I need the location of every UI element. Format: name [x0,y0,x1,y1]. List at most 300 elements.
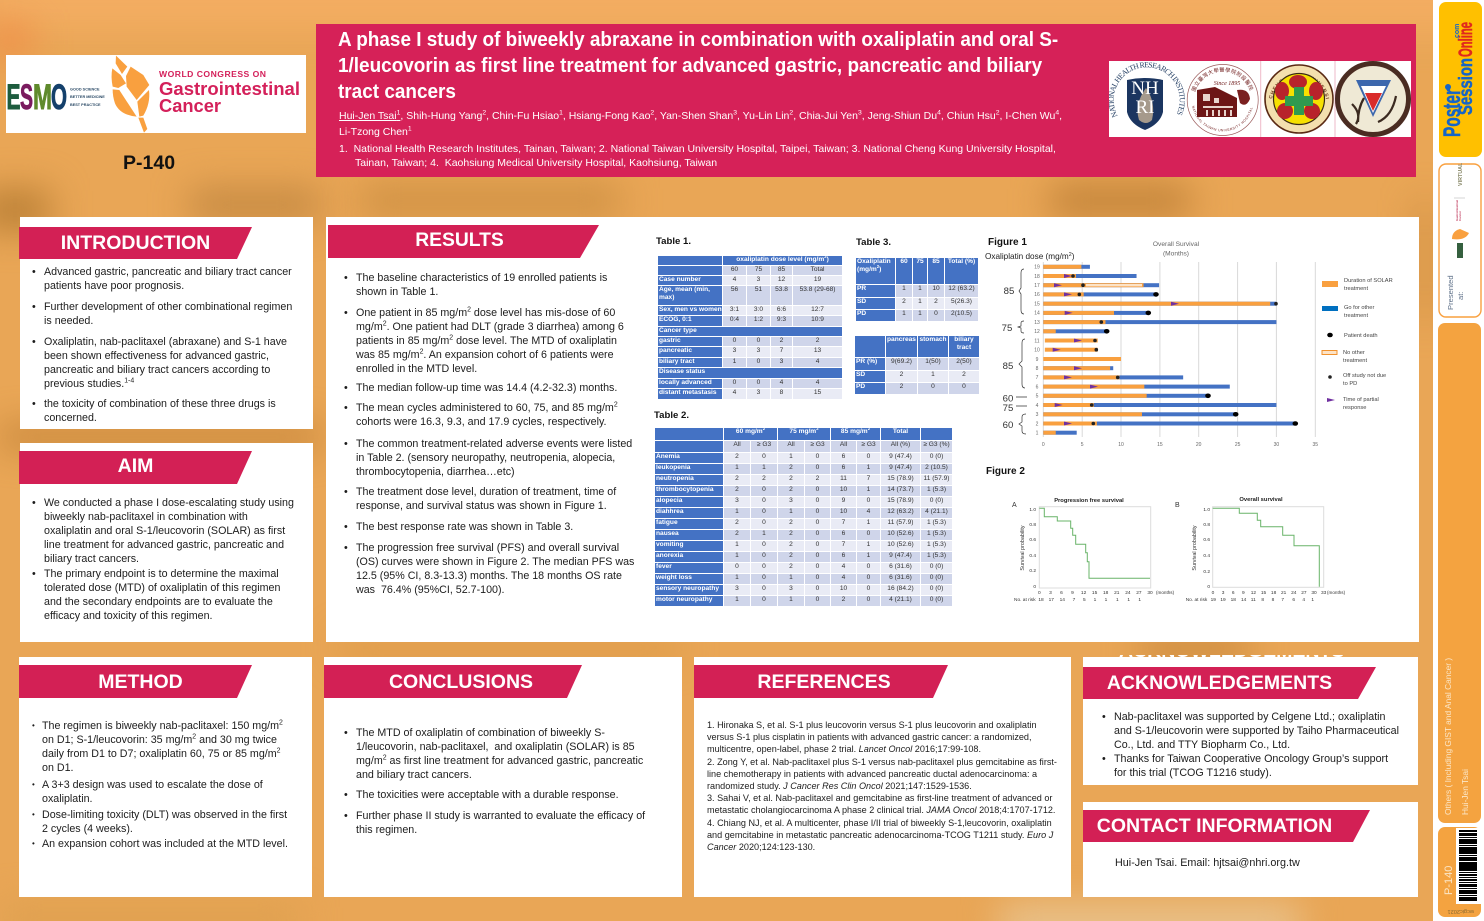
table 3: response by dose: PR [857,285,866,292]
table 3: response by dose: 75 [916,258,924,265]
table 2: adverse events: 0 [762,574,766,580]
panel A: progression free survival: 18 [1103,590,1109,596]
table 2: adverse events: 0 [816,584,819,592]
figure 1: swimmer plot: 6 [1036,384,1039,390]
panel B: overall survival: 21 [1281,590,1287,596]
bullet: mg/m2. One patient had DLT (grade 3 diarrhea) among 6 [356,321,624,333]
panel: method: • [32,810,35,819]
bullet [32,497,294,565]
panel A: progression free survival: 0.2 [1029,568,1036,574]
poster id tab with barcode: P-140 [1443,866,1455,895]
table 2: adverse events: 2 [842,596,845,602]
off study markers [1071,274,1278,425]
bullet: 1/leucovorin, nab-paclitaxel, and oxaliplatin (SOLAR) is 85 [356,741,635,753]
panel B: overall survival: 1 [1311,597,1314,603]
bullet [344,306,624,375]
panel: results: • [344,521,348,533]
table 3: response by dose: 2 [902,298,906,305]
table 1: 0 [733,337,736,344]
table 2: adverse events: 0 [867,584,870,592]
figure 1: swimmer plot: 15 [1034,302,1040,308]
table 1: 4 [780,379,783,386]
figure 1: swimmer plot: 30 [1274,442,1279,448]
table 2: adverse events: 11 [840,474,847,482]
table 2: adverse events: 10 (52.6) [887,540,914,548]
table 1: 10:9 [811,316,824,323]
figure 2: survival curves: Figure 2 [986,466,1025,477]
bullet: and biliary tract cancers. [356,769,472,781]
table 2: adverse events: sensory neuropathy [656,584,719,592]
bullet: in Table 2. (sensory neuropathy, neutropenia, alopecia, [356,452,615,464]
reference list: randomized study. J Cancer Res Clin Oncol 2021;147:1529-1536. [707,781,972,791]
panel A: progression free survival: 3 [1049,590,1052,596]
table 3: response by dose: 5(26.3) [951,298,972,305]
table 2: adverse events: ≥ G3 (%) [923,441,950,448]
table 2: adverse events: 1 [789,452,793,460]
table 2: adverse events: 3 [735,584,739,592]
panel A: progression free survival: 1 [1116,597,1119,603]
legend: treatment [1343,358,1367,364]
panel A: progression free survival: 6 [1060,590,1063,596]
panel: contact information [1083,802,1418,897]
table 2: adverse events: 1 [867,540,870,548]
table 2: adverse events: weight loss [656,574,692,580]
ESMO tagline: BEST PRACTICE [70,103,101,107]
table 1: 4 [816,358,819,365]
table 2 title: Table 2. [654,410,689,421]
table 2: adverse events: 0 [816,596,819,602]
table 1: Cancer type [659,327,697,334]
table 2: adverse events: 1 (5.3) [927,552,946,558]
bullet [32,779,263,805]
table 3: response by tumour type [855,336,979,394]
poster number: P-140 [123,152,175,174]
panel A: progression free survival: 1.0 [1029,507,1036,513]
partial response markers [1053,274,1179,426]
table 2: adverse events: 6 [842,452,845,460]
bullet [32,568,280,622]
table 1: 4 [816,379,819,386]
panel B: overall survival: 0.4 [1203,553,1210,559]
author name: Hui-Jen Tsai [1460,769,1470,815]
panel A: progression free survival: 30 [1147,590,1153,596]
heading: aim [19,451,252,484]
panel: acknowledgements: • [1102,711,1106,723]
bullet: We conducted a phase I dose-escalating study using [44,497,294,509]
bullet: line treatment for advanced gastric, pancreatic and [44,539,284,551]
figure 1: swimmer plot: 10 [1034,348,1040,354]
table 2: adverse events: 10 [840,486,847,492]
figure 1: swimmer plot: 20 [1196,442,1202,448]
table 2: adverse events: 2 [789,464,793,470]
panel A: progression free survival: 0.6 [1029,537,1036,543]
table 2: adverse events: 0 [867,596,870,602]
ESMO wordmark [6,78,67,117]
table 3: response by tumour type: 2 [962,371,966,378]
table 2: adverse events: ≥ G3 [810,441,825,448]
panel B: overall survival: (months) [1327,590,1346,595]
panel: aim [20,443,313,642]
leaf icon [112,56,149,133]
poster title: 1/leucovorin as first line treatment for advanced gastric, pancreatic and biliary [338,55,1042,77]
table 3: response by tumour type: pancreas [887,336,916,343]
bullet: previous studies.1-4 [44,378,134,390]
bullet: Dose-limiting toxicity (DLT) was observed in the first [42,809,287,821]
table 2: adverse events: 0 [816,518,819,526]
table 1: 19 [814,276,821,283]
table 2: adverse events: 14 (73.7) [887,486,914,492]
figure 1: swimmer plot: 35 [1313,442,1318,448]
bullet [344,727,643,781]
figure 1: swimmer plot: 13 [1034,320,1040,326]
figure 2: survival curves [986,466,1346,603]
figure 1: swimmer plot: 12 [1034,329,1040,335]
panel A: progression free survival: 9 [1071,590,1074,596]
table 2: adverse events: 0 [867,562,870,570]
table 2: adverse events: 0 [816,496,819,504]
table 2: adverse events: 1 [867,464,870,470]
table 2: adverse events: 15 (78.9) [887,496,914,504]
table 3: response by tumour type: 2(50) [956,358,972,365]
table 2: adverse events: 0 [867,530,870,536]
seal: National Taiwan University Hospital [1186,64,1259,136]
bullet: Nab-paclitaxel was supported by Celgene Ltd.; oxaliplatin [1114,711,1386,723]
no other treatment segment [1086,284,1142,286]
panel B: overall survival: 8 [1261,597,1264,603]
table 3: response by dose [856,258,978,321]
bullet [32,809,287,835]
panel B: overall survival: Survival probability [1192,525,1198,571]
bullet: The progression free survival (PFS) and overall survival [356,542,619,554]
panel A: progression free survival: 1 [1105,597,1108,603]
bullet: oxaliplatin and oral S-1/leucovorin (SOLAR) as first [44,525,285,537]
legend: to PD [1343,381,1357,387]
table 3: response by dose: Oxaliplatin (mg/m2) [857,258,891,272]
panel B: overall survival: 14 [1241,597,1247,603]
table 2: adverse events: 0 [816,530,819,536]
panel: introduction [20,217,313,429]
panel A: progression free survival: 21 [1114,590,1120,596]
heading: acknowledgements: ACKNOWLEDGEMENTS [1107,672,1332,694]
congress name: Cancer [159,96,221,116]
panel B: overall survival: No. at risk [1186,597,1208,603]
table 1: 0 [733,379,736,386]
panel B: overall survival: 19 [1220,597,1226,603]
bullet [344,542,634,596]
table 3: response by dose: 2(10.5) [951,310,972,317]
table 2: adverse events: 2 [762,474,766,482]
bullet: on D1. [42,762,74,774]
table 2: adverse events: leukopenia [656,464,690,470]
table 3: response by dose: 0 [934,310,938,317]
heading: results: RESULTS [415,230,504,251]
bullet: thrombocytopenia, diarrhea…etc) [356,466,515,478]
table 2: adverse events: 0 (0) [930,496,943,504]
table 2: adverse events: 1 (5.3) [927,486,946,492]
panel A: progression free survival: 15 [1092,590,1098,596]
bullet [344,810,646,836]
table 1: Age, mean (min, max) [659,286,710,300]
table 2: adverse events: 0 (0) [930,584,943,592]
table 2: adverse events: 0 [762,584,766,592]
table 2: adverse events: ≥ G3 [861,441,876,448]
figure 1: swimmer plot: 5 [1081,442,1084,448]
bullet: biweekly nab-paclitaxel in combination with [44,511,248,523]
reference list [707,720,1057,852]
table 1: gastric [659,337,681,344]
table 2: adverse events: Anemia [656,452,680,460]
session tab [1438,323,1481,823]
figure 1: swimmer plot: ) [1072,252,1075,261]
panel: conclusions: • [344,810,348,822]
table 2: adverse events: 2 [789,530,793,536]
heading: contact information [1083,810,1370,842]
presented at box: Gastrointestinal [1455,200,1459,221]
table 3: response by tumour type: 0 [962,383,966,390]
figure 1: swimmer plot: Oxaliplatin dose (mg/m [985,252,1069,261]
panel: introduction: • [32,398,36,410]
legend: Off study not due [1343,373,1386,379]
panel B: overall survival: 11 [1251,597,1256,603]
table 1: Total [811,266,824,273]
table 2: adverse events: 9 (47.4) [889,464,912,470]
bullet: been shown effectiveness for advanced gastric, [44,350,269,362]
panel: aim: • [32,497,36,509]
panel B: overall survival: 19 [1211,597,1216,603]
table 2: adverse events: 6 [842,530,845,536]
reference list: 4. Chiang NJ, et al. A multicenter, phase I/II trial of biweekly S-1,leucovorin, oxaliplatin [707,818,1052,828]
table 2: adverse events: fatigue [656,518,678,526]
table 2: adverse events: 0 [762,518,766,526]
reference list: versus S-1 plus cisplatin in patients with advanced gastric cancer: a randomized, [707,732,1032,742]
table 2: adverse events: 6 [842,464,845,470]
table 3: response by dose: 10 [932,285,940,292]
table 3: response by dose: 1 [902,310,906,317]
bullet: The MTD of oxaliplatin of combination of biweekly S- [356,727,605,739]
table 3: response by tumour type: biliary tract [954,336,974,350]
panel B: overall survival: 4 [1302,597,1305,603]
presented at box: VIRTUAL [1458,163,1464,186]
panel B: overall survival: 0.8 [1203,522,1210,528]
table 2: adverse events: 2 [735,486,739,492]
reference list: Cancer 2020;124:123-130. [707,842,815,852]
heading: references: REFERENCES [757,671,891,693]
figure 1: swimmer plot: 2 [1069,252,1072,258]
panel: results: • [344,438,348,450]
table 1: 53.8 [775,286,788,293]
table 1: 12:7 [811,306,824,313]
panel A: progression free survival: 0 [1038,590,1041,596]
bullet: tolerated dose (MTD) of oxaliplatin of this regimen [44,582,280,594]
congress logo [6,55,306,133]
bullet: The best response rate was shown in Table 3. [356,521,573,533]
bullet: Further phase II study is warranted to evaluate the efficacy of [356,810,645,822]
table 3: response by tumour type: 1 [931,371,935,378]
table 2: adverse events: 1 (5.3) [927,540,946,548]
bullet: this regimen. [356,824,417,836]
figure 1: swimmer plot: 5 [1036,394,1039,400]
table 2: adverse events: 0 [762,486,766,492]
ESMO wordmark: S [20,78,33,117]
table 2: adverse events: 10 [840,508,847,514]
table 2: adverse events: 1 [735,464,739,470]
table 2: adverse events: 12 (63.2) [887,508,914,514]
bullet [1102,711,1399,751]
panel B: overall survival: 27 [1301,590,1307,596]
table 3: response by tumour type: PD [856,383,865,390]
table 1: 15 [814,389,821,396]
table 2: adverse events: neutropenia [656,474,694,482]
table 2: adverse events: 9 (47.4) [889,552,912,558]
table 1: 9:3 [777,316,786,323]
table 2: adverse events: 0 [816,552,819,558]
table 2: adverse events: 4 [867,508,870,514]
table 3: response by dose: 1 [918,310,922,317]
table 2: adverse events: 4 [842,562,845,570]
presented at box: Presented [1446,275,1455,310]
panel A: progression free survival: 5 [1083,597,1086,603]
table 2: adverse events: 3 [789,584,793,592]
table 1: 1 [733,358,736,365]
table 2: adverse events: 0 [867,496,870,504]
table 3: response by dose: 12 (63.2) [948,285,975,292]
badge: Poster Session Online [1439,2,1482,157]
figure 1: swimmer plot: 7 [1036,375,1039,381]
presented at box: Cancer [1458,210,1462,221]
panel A: progression free survival: 27 [1136,590,1142,596]
reference list: multicentre, open-label, phase 2 trial. Lancet Oncol 2016;17:99-108. [707,744,981,754]
table 2: adverse events: 0 [762,552,766,558]
table 2: adverse events: 10 [840,584,847,592]
bullet: the toxicity of combination of these three drugs is [44,398,276,410]
bullet: An expansion cohort was included at the MTD level. [42,838,288,850]
table 2: adverse events: All [733,441,741,448]
table 2: adverse events: 0 [762,562,766,570]
ESMO tagline: BETTER MEDICINE [70,95,105,99]
table 2: adverse events: 0 [735,562,739,570]
reference list: 2. Zong Y, et al. Nab-paclitaxel plus S-1 versus nab-paclitaxel plus gemcitabine as first- [707,757,1057,767]
table 2: adverse events: 2 [816,474,819,482]
heading: method: METHOD [98,671,183,693]
table 2: adverse events: fever [656,562,672,570]
table 2: adverse events: 2 [735,452,739,460]
reference list: 3. Sahai V, et al. Nab-paclitaxel and gemcitabine as first-line treatment of advanced or [707,793,1052,803]
panel: results: • [344,542,348,554]
table 2: adverse events: diahhrea [656,508,683,514]
table 2: adverse events: 0 [816,562,819,570]
table 3: response by dose: Total (%) [948,258,975,265]
panel: introduction: • [32,336,36,348]
panel: introduction: • [32,301,36,313]
figure 1: swimmer plot: 17 [1034,283,1040,289]
bullet: enrolled in the MTD level. [356,363,477,375]
panel A: progression free survival: A [1012,502,1017,509]
panel B: overall survival: 33 [1321,590,1327,596]
table 1: ECOG, 0:1 [659,316,692,323]
panel B: overall survival: 12 [1251,590,1256,596]
ESMO wordmark: O [51,78,67,117]
panel: results: • [344,382,348,394]
reference list: and gemcitabine in metastatic pancreatic adenocarcinoma-TCOG T1211 study. Euro J [707,830,1053,840]
badge: Poster Session Online: Session [1456,58,1477,115]
table 1: 2 [780,337,783,344]
panel: references [694,657,1071,897]
heading: references [694,665,948,698]
table 2: adverse events: 4 (21.1) [889,596,912,602]
panel A: progression free survival: 1 [1094,597,1097,603]
table 2: adverse events: 1 [735,540,739,548]
table 1: 51 [755,286,762,293]
figure 1: swimmer plot: 8 [1036,366,1039,372]
panel A: progression free survival: 24 [1125,590,1131,596]
table 2: adverse events: 0 [762,508,766,514]
presented at box: at: [1456,292,1465,300]
figure 1: swimmer plot: 3 [1036,412,1039,418]
bullet [32,336,287,390]
table 1: 3:0 [754,306,763,313]
table 2: adverse events: 1 [789,596,793,602]
table 2: adverse events: All [787,441,795,448]
figure 1: swimmer plot: 2 [1036,421,1039,427]
table 2: adverse events: Total [893,428,908,435]
bullet: The median follow-up time was 14.4 (4.2-32.3) months. [356,382,617,394]
panel A: progression free survival: 1 [1138,597,1141,603]
panel B: overall survival: 7 [1281,597,1284,603]
panel: results: • [344,307,348,319]
panel B: overall survival: 6 [1292,597,1295,603]
legend: Duration of SOLAR [1344,278,1393,284]
heading: aim: AIM [118,455,153,477]
panel B: overall survival: 9 [1242,590,1245,596]
badge: Poster Session Online: .com [1454,24,1461,40]
legend [1322,278,1393,411]
bullet: One patient in 85 mg/m2 dose level has mis-dose of 60 [356,306,615,319]
table 3: response by tumour type: PR (%) [856,358,877,365]
table 1: 85 [778,266,785,273]
panel: method [19,657,312,897]
legend: Time of partial [1343,397,1379,403]
table 2: adverse events: 1 (5.3) [927,530,946,536]
panel: conclusions: • [344,789,348,801]
table 1: 13 [814,347,821,354]
dose cohort brackets [1016,269,1027,434]
figure 1: swimmer plot: Figure 1 [988,237,1027,248]
bullet: shown in Table 1. [356,286,438,298]
bullet [1102,753,1388,779]
table 1: 0 [757,379,760,386]
congress name [159,69,300,116]
authors: Li-Tzong Chen1 [339,126,412,138]
heading: acknowledgements [1083,667,1376,699]
table 2: adverse events: alopecia [656,496,682,504]
figure 1: swimmer plot: 16 [1034,292,1040,298]
panel A: progression free survival: (months) [1156,590,1175,595]
panel A: progression free survival: 17 [1049,597,1054,603]
table 2: adverse events: 1 [735,574,739,580]
panel A: progression free survival [1012,498,1175,603]
figure 1: swimmer plot: Overall Survival [1153,241,1200,248]
table 2: adverse events: 2 [789,474,793,482]
table 2: adverse events [655,428,952,606]
legend: treatment [1344,286,1368,292]
sidebar [1433,0,1484,921]
panel B: overall survival: 0 [1207,584,1210,590]
legend: response [1343,405,1366,411]
patient death markers [1104,292,1298,426]
bullet [32,719,283,774]
table 1: Case number [659,276,701,283]
table 2: adverse events: 0 [816,574,819,580]
